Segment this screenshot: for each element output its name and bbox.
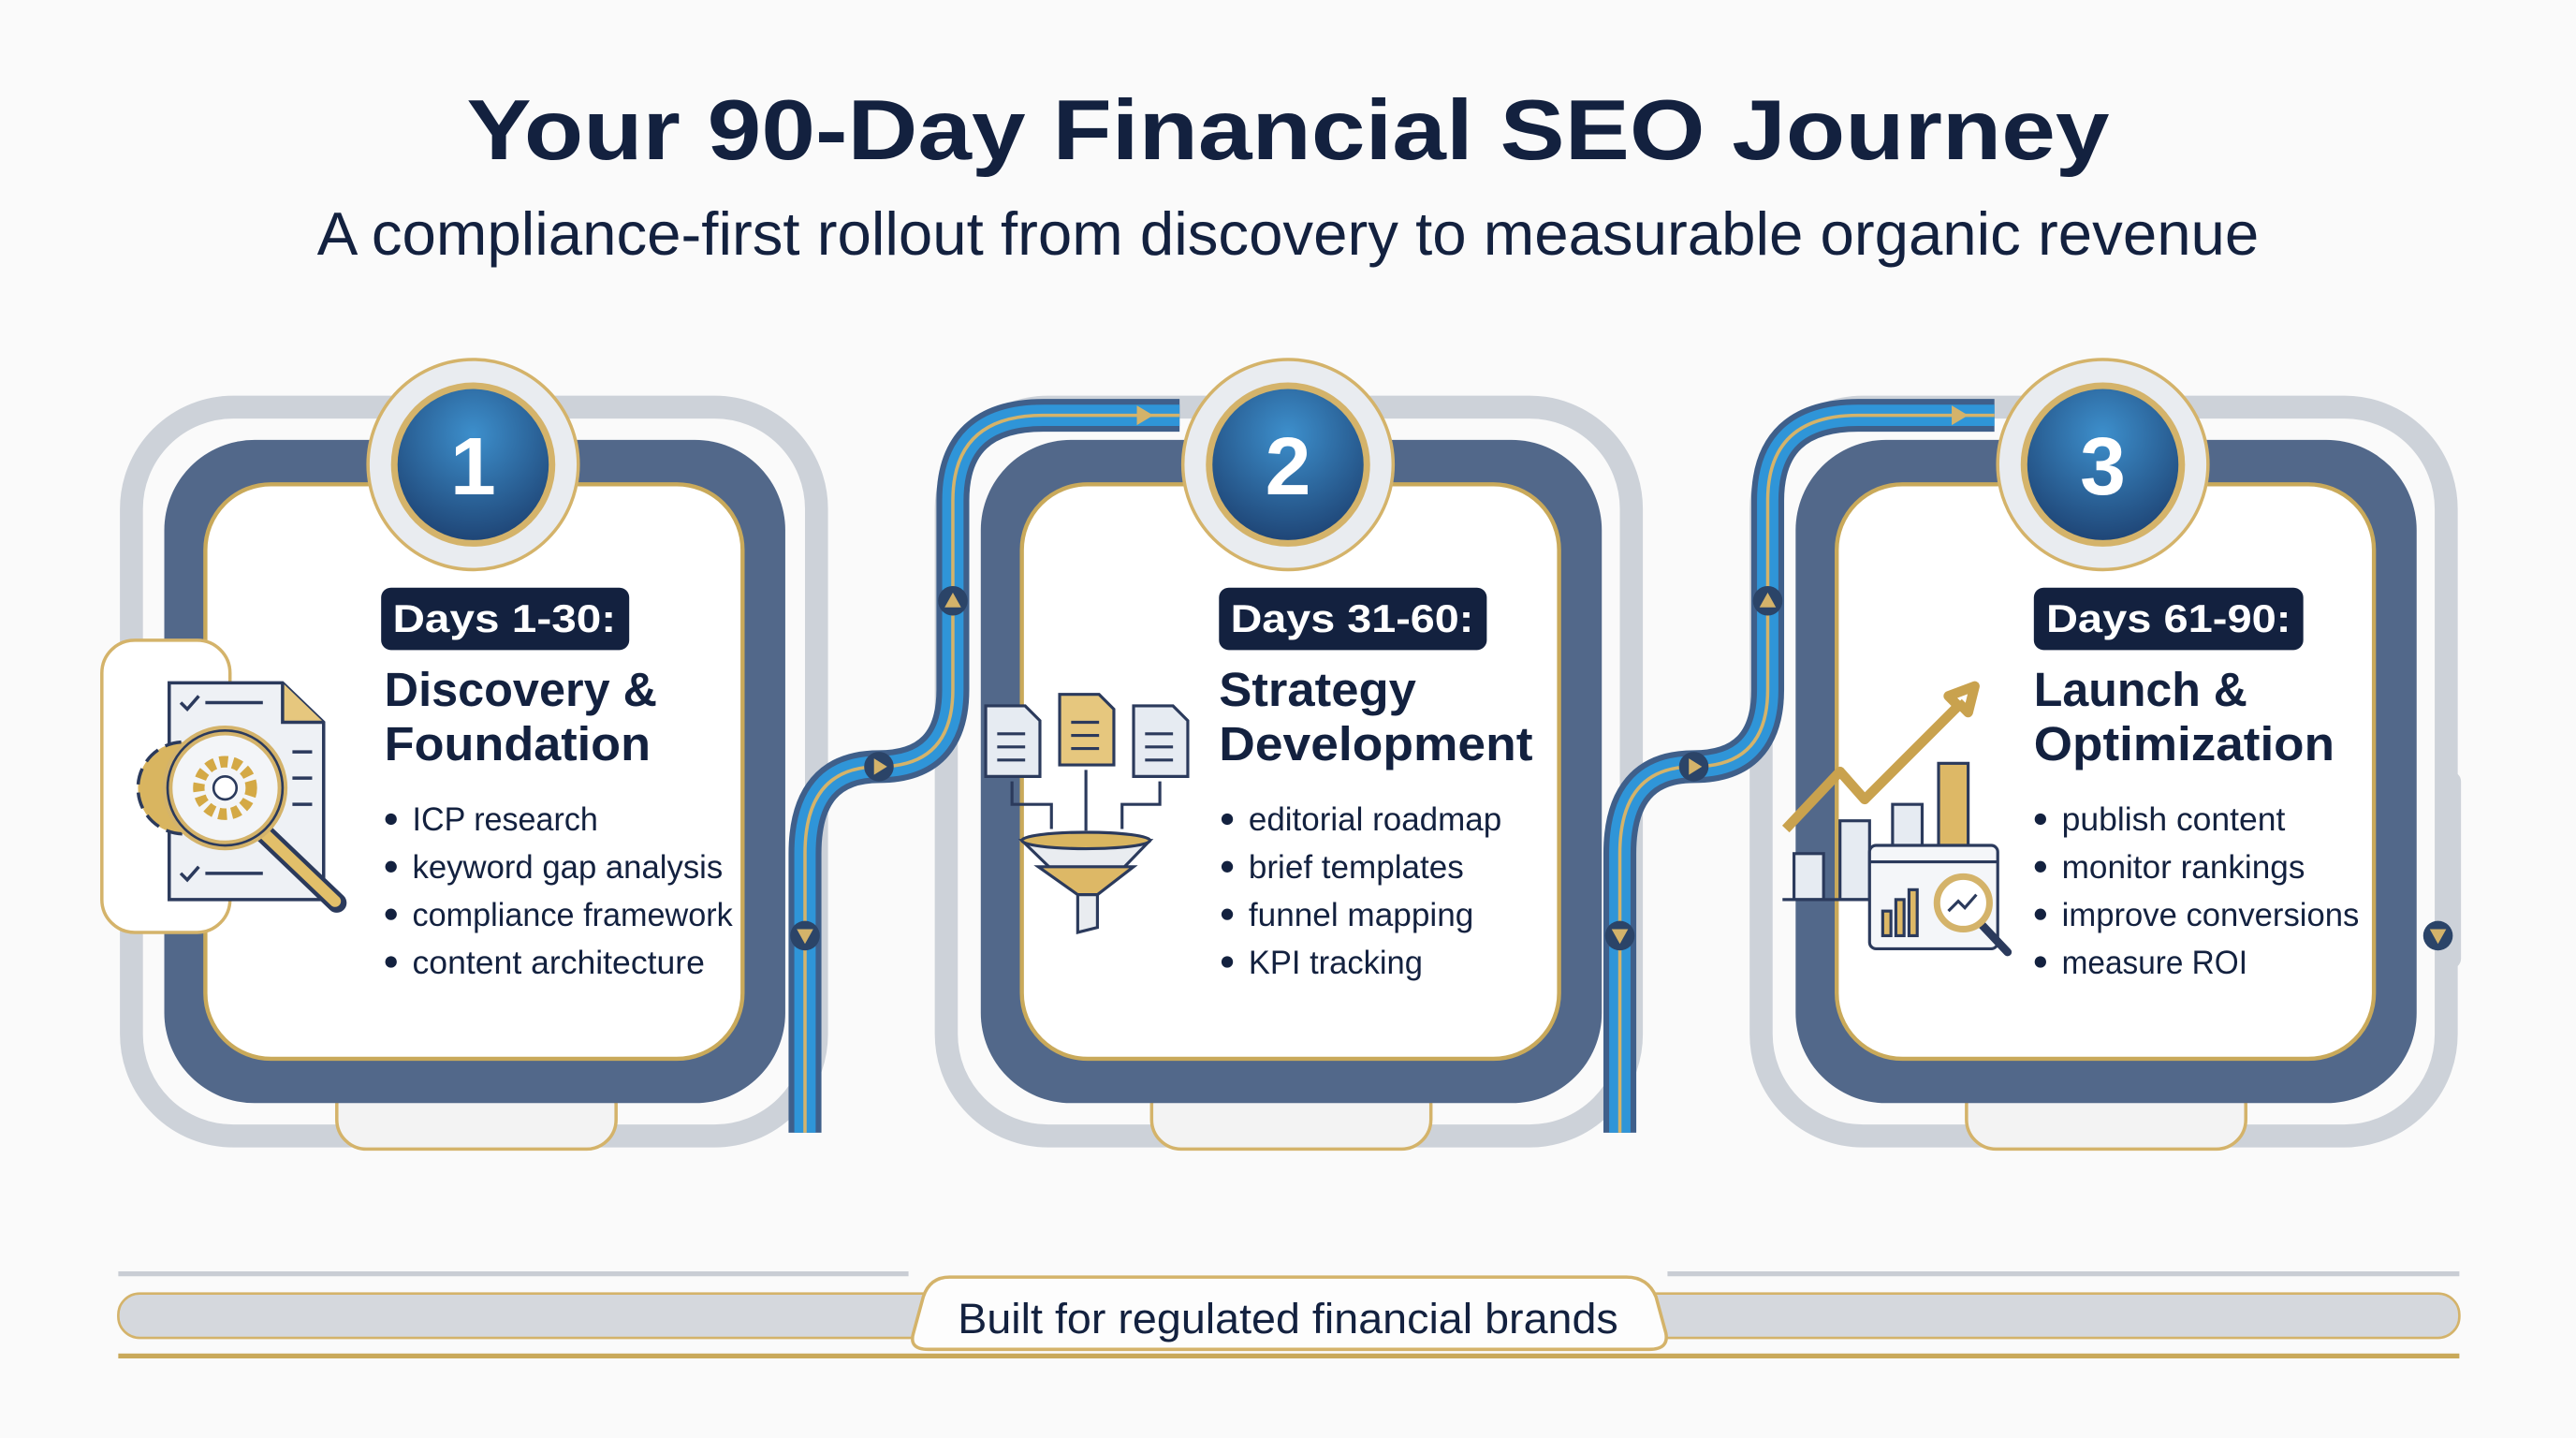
bullets 2: editorial roadmap — [1249, 801, 1501, 838]
bullets 3: measure ROI — [2062, 945, 2247, 981]
bullets 3 — [2035, 801, 2359, 981]
badge 1: 1 — [450, 420, 496, 512]
bullets 3: publish content — [2062, 801, 2286, 838]
badge 3 — [1998, 360, 2208, 569]
bullets 2: funnel mapping — [1249, 897, 1473, 933]
subtitle: A compliance-first rollout from discovery to measurable organic revenue — [317, 199, 2259, 268]
heading 3 — [2034, 663, 2334, 770]
heading 2: Development — [1219, 717, 1533, 770]
footer text: Built for regulated financial brands — [958, 1295, 1618, 1343]
title: Your 90-Day Financial SEO Journey — [466, 82, 2110, 178]
icon: document with gear and magnifier — [102, 640, 337, 932]
panel: phase 3 — [1761, 360, 2461, 1149]
bullets 3: monitor rankings — [2062, 849, 2305, 886]
heading 2 — [1219, 663, 1533, 770]
label: days 61-90: Days 61-90: — [2046, 596, 2291, 640]
heading 2: Strategy — [1219, 663, 1417, 716]
bullets 1: ICP research — [413, 801, 598, 838]
bullets 1: compliance framework — [413, 897, 733, 933]
bullets 1 — [386, 801, 733, 981]
bullets 1: keyword gap analysis — [413, 849, 723, 886]
badge 2: 2 — [1266, 420, 1310, 512]
badge 3: 3 — [2080, 420, 2126, 512]
heading 1 — [385, 663, 657, 770]
label: days 1-30 — [381, 588, 629, 650]
label: days 61-90 — [2034, 588, 2304, 650]
heading 3: Launch & — [2034, 663, 2247, 716]
bullets 1: content architecture — [413, 945, 705, 981]
connector: phase 1 to 2 — [790, 405, 1179, 1133]
panel: phase 2 — [946, 360, 1632, 1149]
icon: documents into funnel — [986, 695, 1188, 932]
label: days 31-60 — [1219, 588, 1486, 650]
bullets 2 — [1222, 801, 1501, 981]
footer banner — [118, 1274, 2459, 1356]
connector: phase 2 to 3 — [1605, 405, 1995, 1133]
panel: phase 1 — [102, 360, 816, 1149]
bullets 2: KPI tracking — [1249, 945, 1423, 981]
label: days 1-30: Days 1-30: — [392, 596, 616, 640]
heading 1: Foundation — [385, 717, 651, 770]
heading 3: Optimization — [2034, 717, 2334, 770]
label: days 31-60: Days 31-60: — [1231, 596, 1473, 640]
badge 1 — [368, 360, 578, 569]
bullets 3: improve conversions — [2062, 897, 2359, 933]
bullets 2: brief templates — [1249, 849, 1464, 886]
badge 2 — [1183, 360, 1393, 569]
heading 1: Discovery & — [385, 663, 657, 716]
icon: growth chart with monitor — [1782, 686, 2008, 952]
